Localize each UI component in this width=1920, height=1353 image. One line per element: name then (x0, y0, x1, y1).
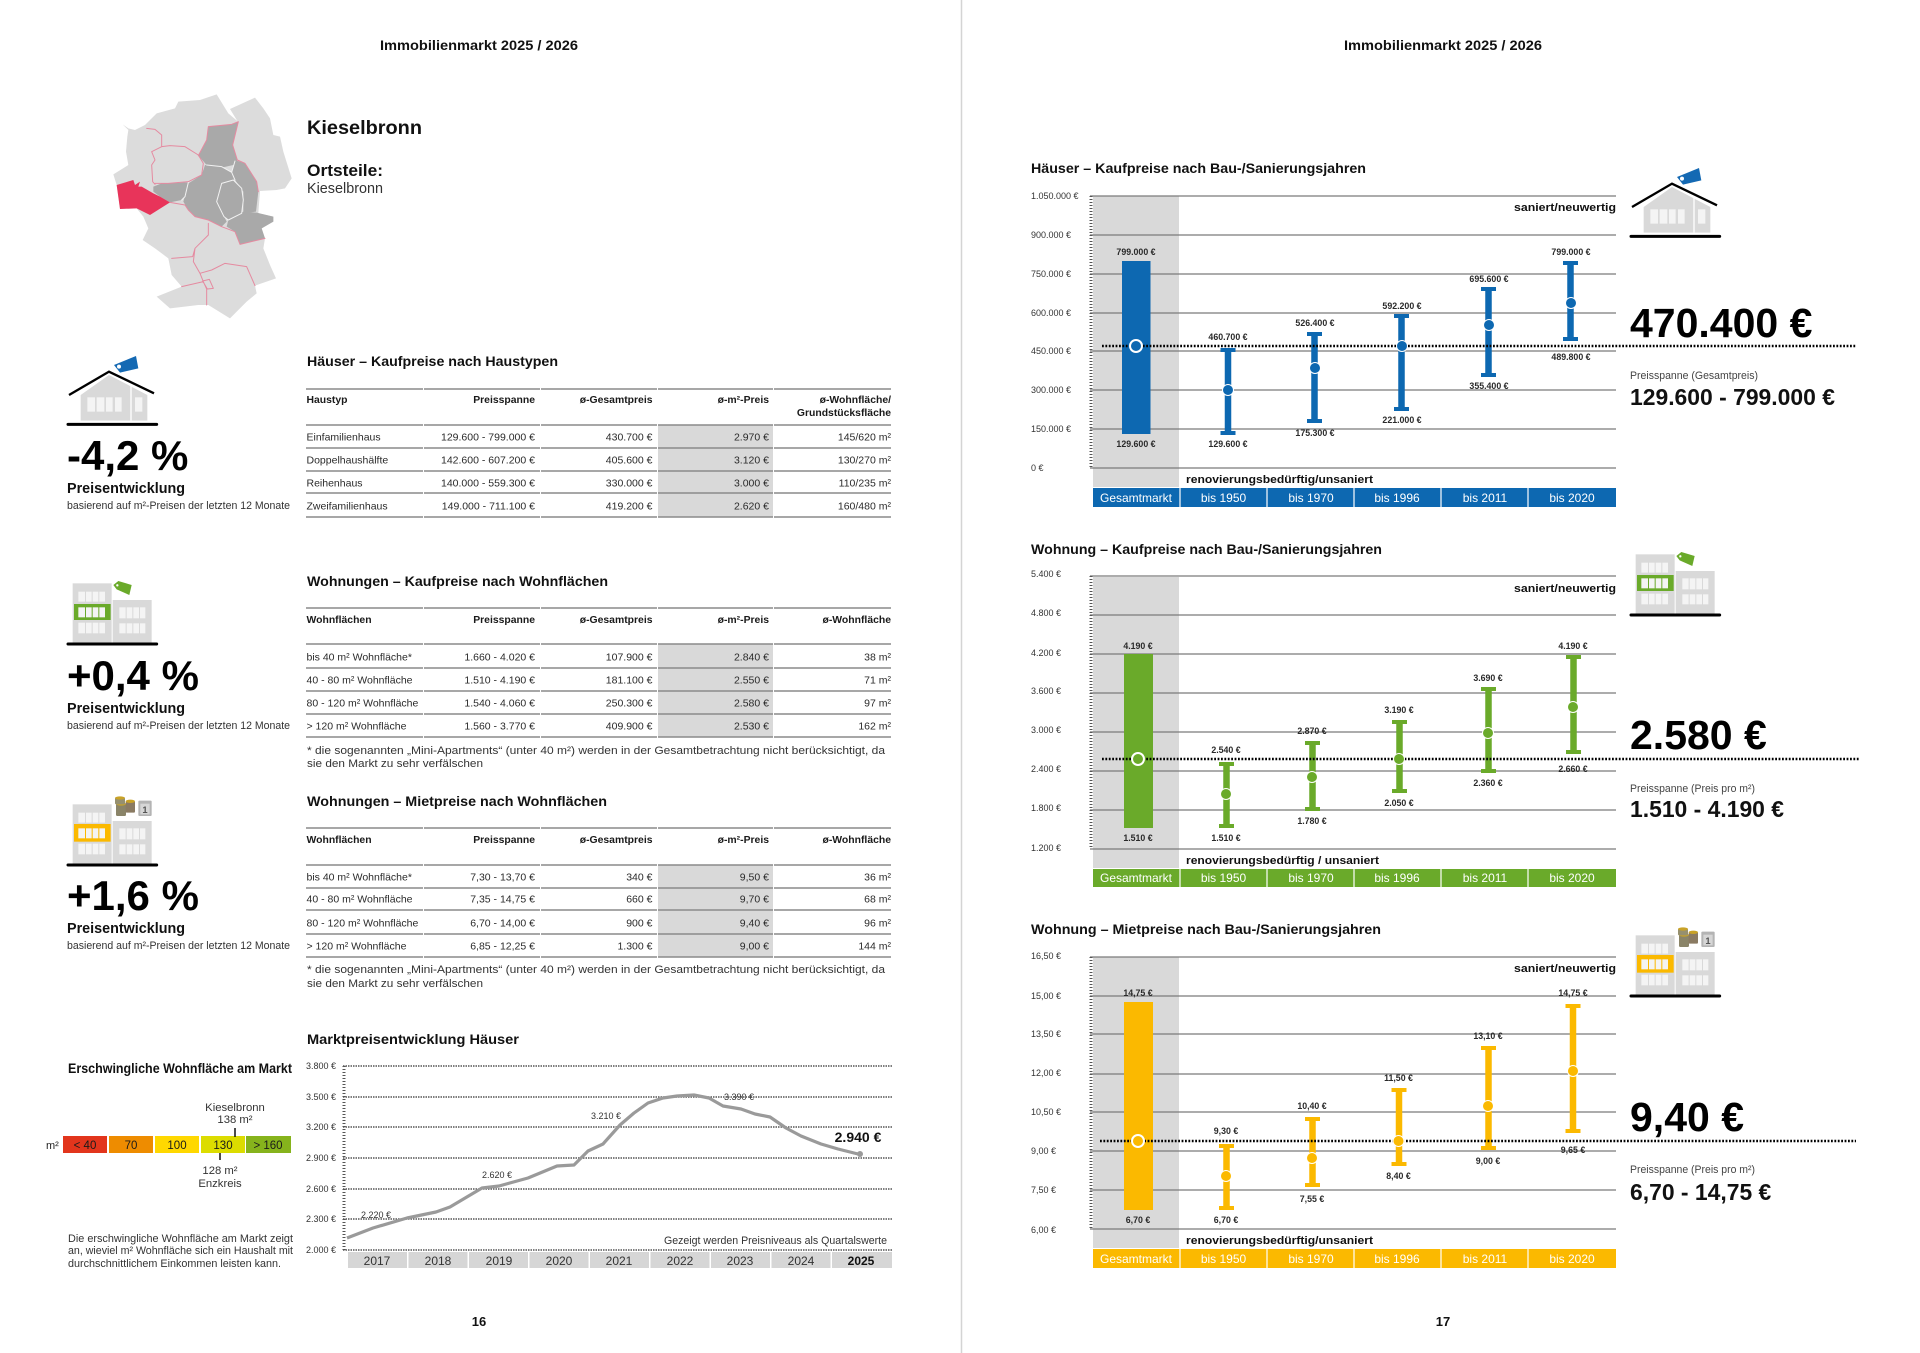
value labels: 3.690 € (1473, 673, 1503, 683)
category axis: bis 1950 (1201, 871, 1247, 885)
header row: ø-Wohnfläche (822, 835, 891, 846)
row: bis 40: 9,50 € (740, 871, 769, 883)
scale: affordable living area: Kieselbronn (205, 1102, 265, 1114)
KPI: houses price development: Preisentwicklung (67, 480, 185, 497)
KPI: rent development: +1,6 % (67, 872, 199, 919)
row: bis 40: 340 € (626, 871, 653, 883)
value labels: 9,30 € (1214, 1126, 1238, 1136)
condition labels (1186, 202, 1616, 486)
row: Reihenhaus: 330.000 € (606, 477, 653, 489)
KPI: rent development (67, 872, 290, 952)
value labels: 1.510 € (1211, 833, 1241, 843)
KPI: average house price: 470.400 € (1630, 300, 1813, 346)
value labels: 460.700 € (1208, 332, 1248, 342)
y axis labels: 2.400 € (1031, 764, 1061, 774)
y axis labels: 750.000 € (1031, 269, 1071, 279)
row: bis 40 (306, 651, 891, 663)
row: Einfamilienhaus: 2.970 € (734, 431, 769, 443)
row: bis 40: 38 m² (864, 651, 891, 663)
explanatory text: durchschnittlichem Einkommen leisten kann. (68, 1258, 281, 1270)
districts value: Kieselbronn (307, 181, 383, 197)
header row: ø-Wohnfläche/ (820, 395, 891, 406)
table: apartment purchase prices by size (306, 608, 891, 737)
row: 40-80: 2.550 € (734, 674, 769, 686)
header row: Preisspanne (473, 395, 535, 406)
scale: affordable living area: < 40 (74, 1140, 96, 1152)
row: 40-80: 1.510 - 4.190 € (464, 674, 535, 686)
row: Doppelhaushälfte (306, 454, 891, 466)
year axis: 2017 (364, 1254, 391, 1268)
heading: market price development: Marktpreisentwicklung Häuser (307, 1032, 520, 1047)
KPI: average apartment price per m2: 2.580 € (1630, 712, 1767, 758)
row: over 120: 2.530 € (734, 720, 769, 732)
year axis (348, 1252, 892, 1268)
value labels: 489.800 € (1551, 352, 1591, 362)
icon: house with blue price tag (1631, 168, 1720, 236)
row: 40-80: 7,35 - 14,75 € (470, 893, 535, 905)
value labels: 221.000 € (1382, 415, 1422, 425)
row: Einfamilienhaus: 430.700 € (606, 431, 653, 443)
row: 80-120: 900 € (626, 917, 653, 929)
row: bis 40: 7,30 - 13,70 € (470, 871, 535, 883)
year axis: 2018 (425, 1254, 452, 1268)
y axis labels: 9,00 € (1031, 1146, 1056, 1156)
y axis labels: 300.000 € (1031, 385, 1071, 395)
header row (306, 835, 891, 846)
districts label: Ortsteile: (307, 162, 383, 180)
row: bis 40: bis 40 m² Wohnfläche* (306, 651, 412, 663)
footnote: purchase table (307, 745, 886, 770)
scale: affordable living area: 138 m² (217, 1114, 253, 1126)
value labels (1123, 988, 1588, 1225)
header row: ø-Gesamtpreis (580, 615, 653, 626)
KPI: houses price development: -4,2 % (67, 432, 188, 479)
scale: affordable living area: 100 (167, 1140, 187, 1152)
row: Einfamilienhaus: 129.600 - 799.000 € (441, 431, 535, 443)
mean markers (1130, 298, 1576, 396)
header row (306, 395, 891, 419)
category axis: Gesamtmarkt (1100, 1252, 1173, 1266)
explanatory text (68, 1233, 294, 1270)
footnote: rent table: sie den Markt zu sehr verfälschen (307, 978, 483, 990)
y axis labels: 3.200 € (306, 1122, 336, 1132)
row: 40-80: 71 m² (864, 674, 891, 686)
condition labels: renovierungsbedürftig / unsaniert (1186, 855, 1379, 867)
row: 40-80: 9,70 € (740, 893, 769, 905)
row: 80-120 (306, 917, 891, 929)
value labels (1123, 641, 1588, 843)
row: 80-120 (306, 697, 891, 709)
value labels: 526.400 € (1295, 318, 1335, 328)
KPI: average rent per m2: 9,40 € (1630, 1094, 1744, 1140)
header row: ø-m²-Preis (718, 395, 769, 406)
category axis (1093, 1249, 1616, 1268)
range chart: apartment rents by build year (1031, 951, 1856, 1268)
row: 80-120: 96 m² (864, 917, 891, 929)
category axis: bis 1996 (1374, 1252, 1420, 1266)
value labels (361, 1092, 882, 1220)
row: Doppelhaushälfte: Doppelhaushälfte (306, 454, 388, 466)
value labels: 175.300 € (1295, 428, 1335, 438)
year axis: 2020 (546, 1254, 573, 1268)
category axis: Gesamtmarkt (1100, 871, 1173, 885)
row: 80-120: 2.580 € (734, 697, 769, 709)
row: 40-80: 660 € (626, 893, 653, 905)
row: 80-120: 80 - 120 m² Wohnfläche (306, 697, 419, 709)
y axis labels: 16,50 € (1031, 951, 1061, 961)
scale: affordable living area (46, 1102, 291, 1190)
row: 80-120: 6,70 - 14,00 € (470, 917, 535, 929)
row: 40-80: 40 - 80 m² Wohnfläche (306, 893, 413, 905)
y axis labels: 6,00 € (1031, 1225, 1056, 1235)
year axis: 2022 (667, 1254, 694, 1268)
y axis labels: 2.600 € (306, 1184, 336, 1194)
mean line (1102, 345, 1856, 347)
row: 80-120: 80 - 120 m² Wohnfläche (306, 917, 419, 929)
row: 40-80: 40 - 80 m² Wohnfläche (306, 674, 413, 686)
row: Reihenhaus (306, 477, 891, 489)
value labels: 3.390 € (724, 1092, 754, 1102)
y axis labels: 15,00 € (1031, 991, 1061, 1001)
value labels: 14,75 € (1123, 988, 1153, 998)
year axis: 2023 (727, 1254, 754, 1268)
row: 80-120: 250.300 € (606, 697, 653, 709)
KPI: rent development: basierend auf m²-Preisen der letzten 12 Monate (67, 940, 290, 952)
price range: rent (1630, 1164, 1772, 1205)
row: Zweifamilienhaus: 2.620 € (734, 500, 769, 512)
value labels (1116, 247, 1591, 449)
municipality title: Kieselbronn (307, 118, 422, 139)
row: over 120 (306, 720, 891, 732)
header row: Haustyp (306, 395, 348, 406)
category axis: Gesamtmarkt (1100, 491, 1173, 505)
row: Reihenhaus: 110/235 m² (839, 477, 891, 489)
table heading: apartment purchase: Wohnungen – Kaufpreise nach Wohnflächen (307, 574, 608, 589)
row: Reihenhaus: Reihenhaus (306, 477, 363, 489)
KPI: apartment purchase price development: basierend auf m²-Preisen der letzten 12 Monate (67, 720, 290, 732)
y axis labels: 4.200 € (1031, 648, 1061, 658)
row: Zweifamilienhaus: Zweifamilienhaus (306, 500, 388, 512)
mean line (1102, 758, 1859, 760)
row: over 120: 409.900 € (606, 720, 653, 732)
row: 40-80 (306, 674, 891, 686)
category axis (1093, 488, 1616, 507)
row: 40-80 (306, 893, 891, 905)
year axis: 2019 (486, 1254, 513, 1268)
y axis labels: 2.300 € (306, 1214, 336, 1224)
y axis labels: 2.000 € (306, 1245, 336, 1255)
KPI: rent development: Preisentwicklung (67, 920, 185, 937)
condition labels: renovierungsbedürftig/unsaniert (1186, 474, 1373, 486)
row: over 120: > 120 m² Wohnfläche (306, 720, 407, 732)
scale: affordable living area: Enzkreis (198, 1178, 242, 1190)
value labels: 129.600 € (1208, 439, 1248, 449)
icon: apartment building with coins and calendar (68, 796, 157, 865)
table heading: houses: Häuser – Kaufpreise nach Haustypen (307, 354, 558, 369)
row: bis 40: 2.840 € (734, 651, 769, 663)
value labels: 14,75 € (1558, 988, 1588, 998)
category axis (1093, 869, 1616, 887)
condition labels: saniert/neuwertig (1514, 963, 1616, 975)
bars (1122, 261, 1578, 435)
row: Doppelhaushälfte: 405.600 € (606, 454, 653, 466)
page number 16: 16 (472, 1314, 486, 1329)
y axis labels: 3.000 € (1031, 725, 1061, 735)
y axis labels: 150.000 € (1031, 424, 1071, 434)
row: 80-120: 1.540 - 4.060 € (464, 697, 535, 709)
KPI: apartment purchase price development: Preisentwicklung (67, 700, 185, 717)
row: Einfamilienhaus: 145/620 m² (838, 431, 891, 443)
row: over 120: 162 m² (858, 720, 891, 732)
year axis: 2021 (606, 1254, 633, 1268)
mean line (1100, 1140, 1856, 1142)
row: over 120: 1.560 - 3.770 € (464, 720, 535, 732)
price range: houses: Preisspanne (Gesamtpreis) (1630, 370, 1758, 382)
row: Zweifamilienhaus (306, 500, 891, 512)
row: over 120: 1.300 € (617, 940, 653, 952)
price range: apartment purchase: 1.510 - 4.190 € (1630, 796, 1784, 822)
y axis labels: 3.500 € (306, 1092, 336, 1102)
category axis: bis 2011 (1463, 871, 1508, 885)
y axis labels: 900.000 € (1031, 230, 1071, 240)
icon: apartment with green tag (1631, 552, 1720, 615)
value labels: 8,40 € (1386, 1171, 1411, 1181)
footnote: rent table (307, 964, 886, 990)
row: Doppelhaushälfte: 130/270 m² (838, 454, 891, 466)
row: Doppelhaushälfte: 142.600 - 607.200 € (441, 454, 535, 466)
row: Doppelhaushälfte: 3.120 € (734, 454, 769, 466)
row: 80-120: 97 m² (864, 697, 891, 709)
y axis labels: 3.800 € (306, 1061, 336, 1071)
row: over 120 (306, 940, 891, 952)
footnote: purchase table: sie den Markt zu sehr verfälschen (307, 758, 483, 770)
category axis: bis 1970 (1288, 871, 1334, 885)
row: Einfamilienhaus: Einfamilienhaus (306, 431, 381, 443)
header row: Grundstücksfläche (797, 408, 891, 419)
value labels: 2.660 € (1558, 764, 1588, 774)
y axis labels: 4.800 € (1031, 608, 1061, 618)
category axis: bis 1970 (1288, 491, 1334, 505)
value labels: 11,50 € (1384, 1073, 1413, 1083)
value labels: 2.540 € (1211, 745, 1241, 755)
header row: ø-m²-Preis (718, 615, 769, 626)
value labels: 4.190 € (1558, 641, 1588, 651)
price range: apartment purchase: Preisspanne (Preis pro m²) (1630, 783, 1755, 795)
value labels: 2.220 € (361, 1210, 391, 1220)
value labels: 6,70 € (1214, 1215, 1238, 1225)
row: Einfamilienhaus (306, 431, 891, 443)
year axis: 2025 (848, 1254, 875, 1268)
range chart: houses purchase prices by build year (1031, 191, 1856, 507)
category axis: bis 1950 (1201, 1252, 1247, 1266)
value labels: 2.050 € (1384, 798, 1414, 808)
table heading: apartment rent: Wohnungen – Mietpreise nach Wohnflächen (307, 794, 607, 809)
header row (306, 615, 891, 626)
category axis: bis 1970 (1288, 1252, 1334, 1266)
value labels: 9,00 € (1476, 1156, 1500, 1166)
price range: houses (1630, 370, 1835, 410)
heading: affordable living area: Erschwingliche Wohnfläche am Markt (68, 1061, 292, 1076)
value labels: 7,55 € (1300, 1194, 1324, 1204)
value labels: 13,10 € (1473, 1031, 1503, 1041)
header row: Wohnflächen (306, 615, 372, 626)
page divider (960, 0, 962, 1353)
right page header: Immobilienmarkt 2025 / 2026 (1344, 38, 1543, 53)
KPI: apartment purchase price development: +0,4 % (67, 652, 199, 699)
row: over 120: > 120 m² Wohnfläche (306, 940, 407, 952)
y axis labels: 450.000 € (1031, 346, 1071, 356)
icon: house with blue price tag (68, 356, 157, 424)
map: Enzkreis municipalities with Kieselbronn highlighted (113, 94, 292, 318)
value labels: 695.600 € (1469, 274, 1509, 284)
y axis labels: 12,00 € (1031, 1068, 1061, 1078)
icon: apartment with coins and calendar (1631, 927, 1720, 996)
value labels: 799.000 € (1116, 247, 1156, 257)
price range: rent: 6,70 - 14,75 € (1630, 1179, 1772, 1205)
mean markers (1132, 702, 1578, 800)
row: bis 40: bis 40 m² Wohnfläche* (306, 871, 412, 883)
category axis: bis 1996 (1374, 871, 1420, 885)
value labels: 799.000 € (1551, 247, 1591, 257)
row: over 120: 6,85 - 12,25 € (470, 940, 535, 952)
value labels: 2.620 € (482, 1170, 512, 1180)
price range: houses: 129.600 - 799.000 € (1630, 384, 1835, 410)
header row: ø-Gesamtpreis (580, 835, 653, 846)
value labels: 1.510 € (1123, 833, 1153, 843)
row: Zweifamilienhaus: 149.000 - 711.100 € (442, 500, 535, 512)
KPI: apartment purchase price development (67, 652, 290, 732)
icon: apartment building with green tag (68, 581, 157, 644)
value labels: 1.780 € (1297, 816, 1327, 826)
left page header: Immobilienmarkt 2025 / 2026 (380, 38, 579, 53)
range chart: apartment purchase prices by build year (1031, 569, 1859, 887)
row: Zweifamilienhaus: 160/480 m² (838, 500, 891, 512)
table: houses purchase prices by type (306, 389, 891, 517)
y axis labels: 2.900 € (306, 1153, 336, 1163)
header row: ø-Gesamtpreis (580, 395, 653, 406)
y axis labels (1031, 191, 1079, 473)
value labels: 2.360 € (1473, 778, 1503, 788)
chart title: houses: Häuser – Kaufpreise nach Bau-/Sanierungsjahren (1031, 161, 1366, 176)
category axis: bis 2020 (1549, 491, 1595, 505)
category axis: bis 2020 (1549, 1252, 1595, 1266)
chart title: apartment purchase: Wohnung – Kaufpreise nach Bau-/Sanierungsjahren (1031, 542, 1382, 557)
condition labels: saniert/neuwertig (1514, 202, 1616, 214)
condition labels (1186, 583, 1616, 867)
y axis labels: 3.600 € (1031, 686, 1061, 696)
value labels: 3.210 € (591, 1111, 621, 1121)
y axis labels: 1.800 € (1031, 803, 1061, 813)
scale: affordable living area: > 160 (253, 1140, 283, 1152)
mean markers (1132, 1066, 1578, 1182)
bars (1124, 654, 1581, 828)
scale: affordable living area: 128 m² (202, 1165, 238, 1177)
value labels: 4.190 € (1123, 641, 1153, 651)
y axis labels: 1.050.000 € (1031, 191, 1079, 201)
y axis labels: 13,50 € (1031, 1029, 1061, 1039)
year axis: 2024 (788, 1254, 815, 1268)
value labels: 2.940 € (835, 1129, 882, 1145)
condition labels (1186, 963, 1616, 1247)
category axis: bis 2011 (1463, 1252, 1508, 1266)
row: bis 40: 1.660 - 4.020 € (464, 651, 535, 663)
price line (347, 1095, 863, 1238)
price range: apartment purchase (1630, 783, 1784, 822)
row: bis 40: 107.900 € (606, 651, 653, 663)
value labels: 129.600 € (1116, 439, 1156, 449)
category axis: bis 1950 (1201, 491, 1247, 505)
row: 80-120: 9,40 € (740, 917, 769, 929)
scale: affordable living area: 70 (125, 1140, 137, 1152)
header row: ø-m²-Preis (718, 835, 769, 846)
value labels: 6,70 € (1126, 1215, 1150, 1225)
value labels: 592.200 € (1382, 301, 1422, 311)
row: 40-80: 181.100 € (606, 674, 653, 686)
table: apartment rents by size (306, 828, 891, 957)
y axis labels: 1.200 € (1031, 843, 1061, 853)
row: over 120: 144 m² (858, 940, 891, 952)
page number 17: 17 (1436, 1314, 1450, 1329)
category axis: bis 2020 (1549, 871, 1595, 885)
bars (1124, 1002, 1580, 1210)
value labels: 3.190 € (1384, 705, 1414, 715)
category axis: bis 2011 (1463, 491, 1508, 505)
value labels: 355.400 € (1469, 381, 1509, 391)
price range: rent: Preisspanne (Preis pro m²) (1630, 1164, 1755, 1176)
KPI: houses price development (67, 432, 290, 512)
scale: affordable living area: 130 (213, 1140, 233, 1152)
y axis labels: 10,50 € (1031, 1107, 1061, 1117)
scale: affordable living area: m² (46, 1140, 59, 1152)
footnote: purchase table: * die sogenannten „Mini-Apartments“ (unter 40 m²) werden in der Gesamtbetrachtung nicht berücksichtigt, da (307, 745, 886, 757)
footnote: rent table: * die sogenannten „Mini-Apartments“ (unter 40 m²) werden in der Gesamtbetrachtung nicht berücksichtigt, da (307, 964, 886, 976)
row: over 120: 9,00 € (740, 940, 769, 952)
value labels: 2.870 € (1297, 726, 1327, 736)
row: bis 40: 36 m² (864, 871, 891, 883)
row: Reihenhaus: 140.000 - 559.300 € (441, 477, 535, 489)
explanatory text: Die erschwingliche Wohnfläche am Markt zeigt (68, 1233, 294, 1245)
y axis labels: 600.000 € (1031, 308, 1071, 318)
y axis labels (1031, 951, 1061, 1235)
row: Zweifamilienhaus: 419.200 € (606, 500, 653, 512)
header row: Wohnflächen (306, 835, 372, 846)
KPI: houses price development: basierend auf m²-Preisen der letzten 12 Monate (67, 500, 290, 512)
y axis labels (306, 1061, 336, 1255)
category axis: bis 1996 (1374, 491, 1420, 505)
y axis labels (1031, 569, 1061, 853)
header row: Preisspanne (473, 615, 535, 626)
explanatory text: an, wieviel m² Wohnfläche sich ein Haushalt mit (68, 1245, 294, 1257)
y axis labels: 5.400 € (1031, 569, 1061, 579)
chart note: Gezeigt werden Preisniveaus als Quartalswerte (664, 1235, 887, 1247)
header row: ø-Wohnfläche (822, 615, 891, 626)
chart title: apartment rent: Wohnung – Mietpreise nach Bau-/Sanierungsjahren (1031, 922, 1381, 937)
condition labels: saniert/neuwertig (1514, 583, 1616, 595)
row: Reihenhaus: 3.000 € (734, 477, 769, 489)
condition labels: renovierungsbedürftig/unsaniert (1186, 1235, 1373, 1247)
line chart: market price development houses (306, 1061, 892, 1268)
y axis labels: 0 € (1031, 463, 1044, 473)
y axis labels: 7,50 € (1031, 1185, 1056, 1195)
row: bis 40 (306, 871, 891, 883)
value labels: 9,65 € (1561, 1145, 1585, 1155)
header row: Preisspanne (473, 835, 535, 846)
value labels: 10,40 € (1297, 1101, 1327, 1111)
row: 40-80: 68 m² (864, 893, 891, 905)
